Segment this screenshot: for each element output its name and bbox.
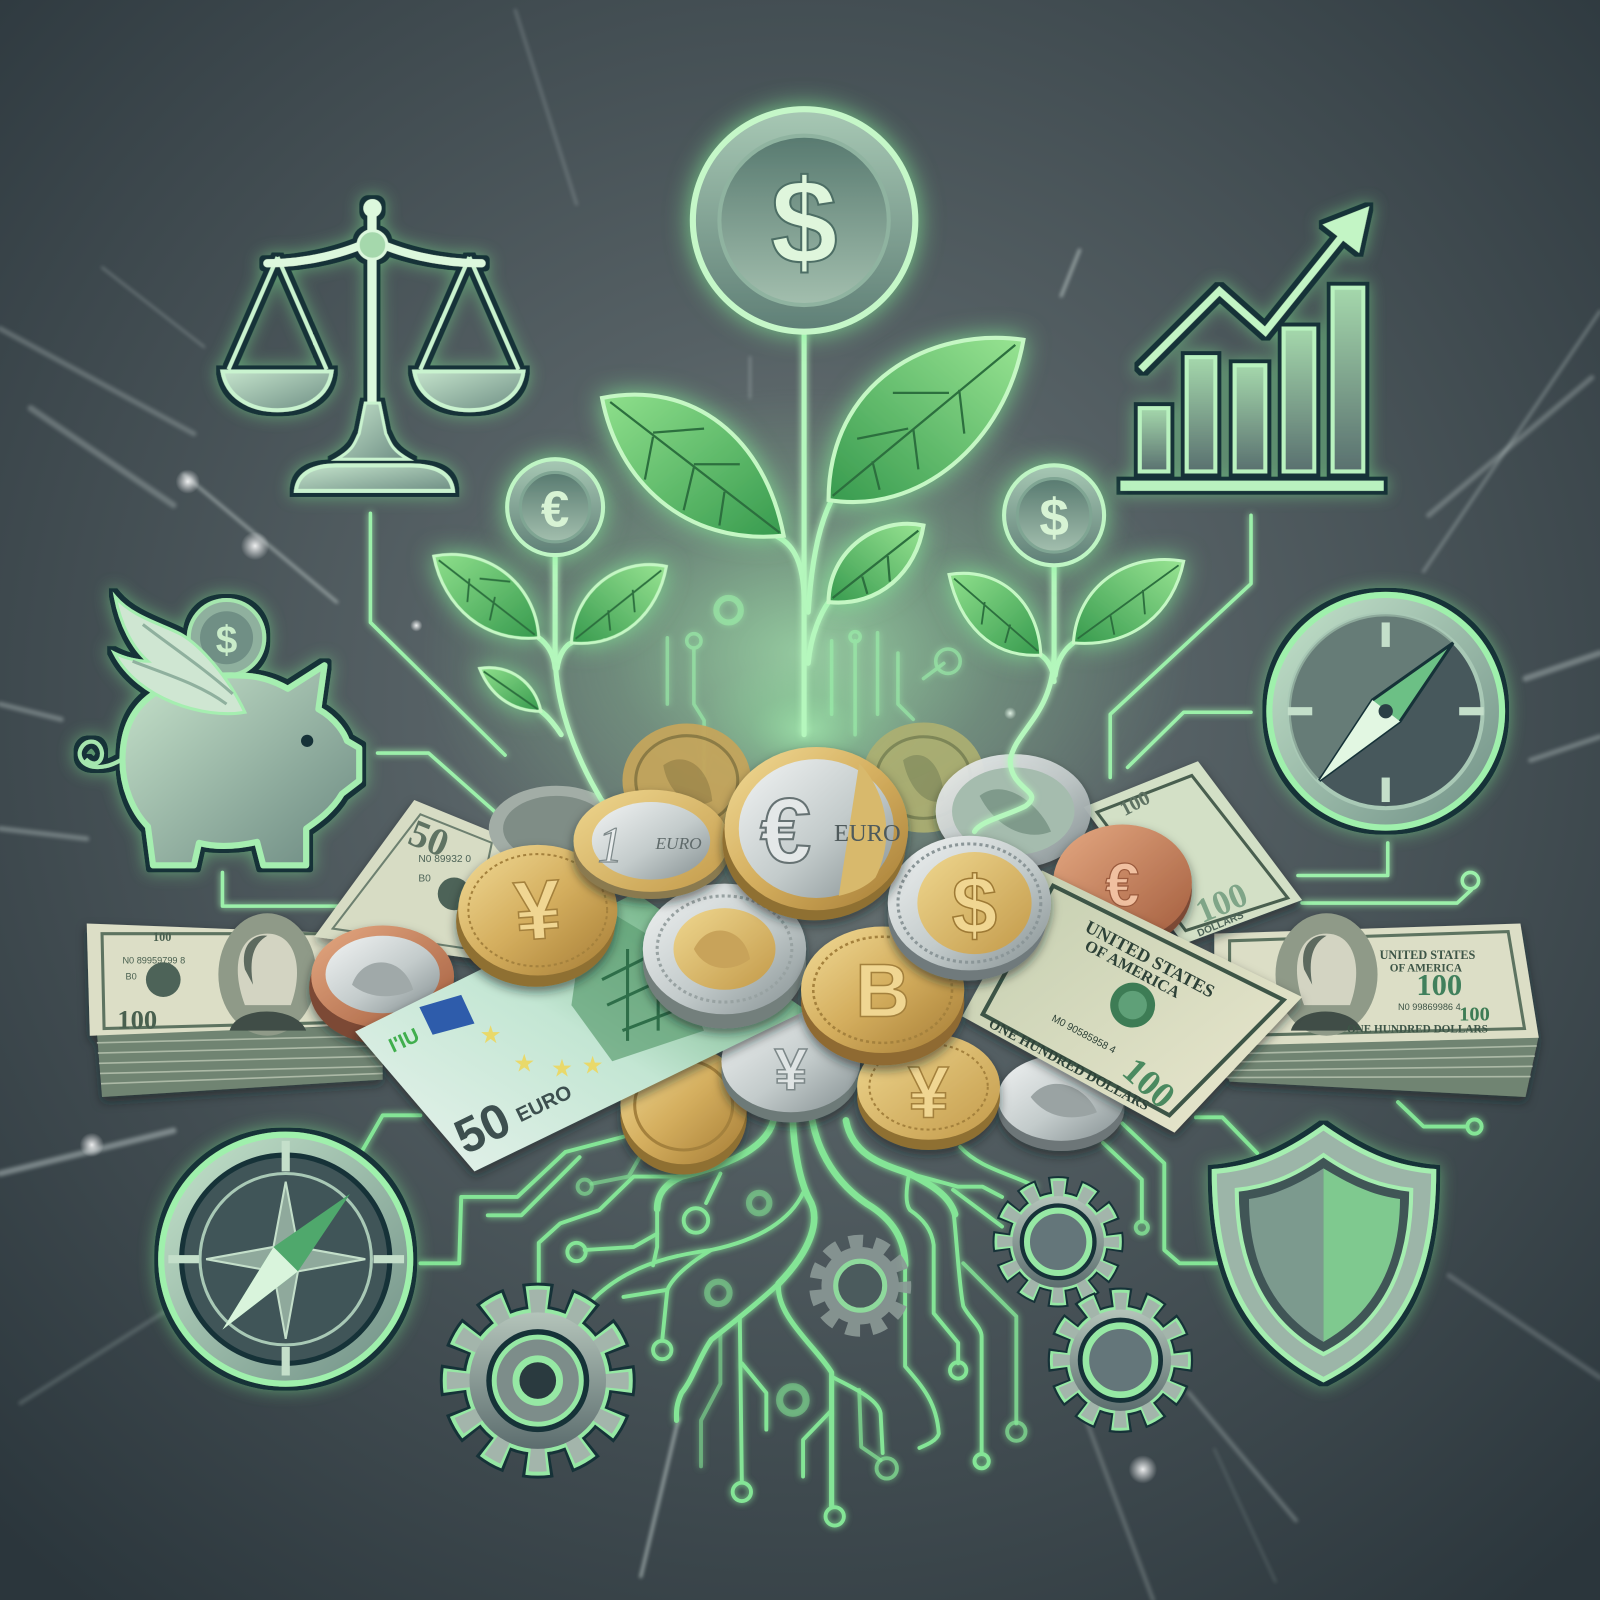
bottom coin gold yen: ¥ [908, 1050, 949, 1133]
back silver coin left [489, 786, 623, 871]
euro banknote: ★ [513, 1050, 535, 1077]
euro banknote: I'IU [386, 1025, 423, 1058]
euro banknote: ★ [582, 1052, 604, 1079]
icon: growth bar chart with arrow [1120, 206, 1384, 491]
small plant right [949, 465, 1184, 655]
dollar banknote: M0 90585958 4 [1050, 1013, 1118, 1056]
euro note value: 50 [446, 1093, 519, 1165]
right banknote stack: N0 99869986 4 [1398, 1002, 1461, 1012]
icon: dim central gear [821, 1247, 899, 1324]
icon: balance scales [222, 199, 523, 491]
euro banknote [355, 893, 806, 1171]
back left banknote [314, 800, 504, 960]
bottom coin silver yen [721, 1010, 860, 1122]
dollar banknote: UNITED STATES [1082, 916, 1218, 1002]
coin: bitcoin: B [855, 949, 910, 1033]
root trunks [657, 1120, 955, 1284]
leaves [434, 554, 666, 711]
right banknote stack: OF AMERICA [1390, 962, 1463, 974]
euro banknote: ★ [551, 1056, 573, 1083]
piggy coin [189, 600, 264, 676]
back gold coin right [862, 722, 985, 833]
dollar banknote [962, 870, 1302, 1133]
icon: gear right lower [1062, 1302, 1179, 1419]
dollar banknote: OF AMERICA [1082, 936, 1184, 1002]
back right banknote: DOLLARS [1196, 910, 1246, 939]
icon: shield [1214, 1128, 1434, 1380]
coin: copper euro [1053, 824, 1192, 949]
central green glow [418, 388, 1194, 918]
euro banknote: ★ [480, 1022, 502, 1049]
back right banknote: 100 [1190, 875, 1253, 931]
euro coin sprout: € [541, 481, 569, 538]
back silver coin right [936, 754, 1091, 868]
coin: copper left [309, 926, 454, 1044]
euro coin sprout [507, 459, 603, 555]
coin: yen gold [456, 845, 617, 987]
left banknote stack: B0 [126, 972, 137, 982]
dollar coin sprout: $ [1039, 489, 1069, 548]
leaves [949, 559, 1184, 655]
right banknote stack [1214, 913, 1539, 1097]
left banknote stack: N0 89959799 8 [122, 955, 185, 965]
dollar banknote: 100 [1115, 1049, 1183, 1116]
large plant [602, 109, 1023, 603]
sparkles [80, 469, 1157, 1484]
euro banknote: EURO [513, 1081, 576, 1127]
coin: big euro [722, 747, 908, 920]
small plant left [434, 459, 666, 711]
icon: compass lower left [161, 1135, 410, 1384]
icon: gear right upper [1005, 1189, 1111, 1295]
back right banknote: 100 [1117, 787, 1154, 821]
coin: dollar [888, 836, 1051, 981]
large leaves [602, 338, 1023, 603]
bottom coin gold [620, 1046, 747, 1174]
icon: compass upper right [1269, 595, 1502, 828]
right banknote stack: ONE HUNDRED DOLLARS [1347, 1024, 1488, 1036]
dollar coin sprout [1004, 465, 1104, 565]
coin: dollar: $ [952, 861, 997, 952]
right banknote stack: UNITED STATES [1380, 948, 1476, 962]
large dollar coin: $ [771, 154, 838, 289]
bottom coin gold yen [857, 1034, 1000, 1150]
left banknote stack: 100 [117, 1005, 157, 1035]
bottom coin silver right [998, 1055, 1124, 1151]
back left banknote: N0 89932 0 [418, 854, 471, 865]
right banknote stack: 100 [1459, 1003, 1490, 1025]
left banknote stack: 100 [153, 930, 171, 944]
dollar banknote: ONE HUNDRED DOLLARS [986, 1016, 1152, 1114]
coin: yen gold: ¥ [511, 861, 565, 958]
right banknote stack: 100 [1416, 968, 1462, 1002]
coin: one euro [573, 790, 729, 899]
back right banknote [1084, 761, 1302, 944]
back left banknote: B0 [418, 874, 431, 885]
money pile [87, 335, 1539, 1174]
large dollar coin [693, 109, 915, 332]
coin: big euro: € [760, 780, 811, 882]
coin: one euro: EURO [654, 834, 702, 853]
roots and circuit traces [352, 1102, 1482, 1526]
coin: one euro: 1 [597, 818, 623, 874]
coin: bitcoin [801, 927, 964, 1065]
coin: big euro: EURO [834, 820, 901, 847]
back left banknote: 50 [403, 811, 455, 866]
piggy coin: $ [216, 619, 238, 662]
bottom coin silver yen: ¥ [774, 1036, 807, 1103]
plant stems over back coins [539, 335, 1073, 832]
back gold coin left [622, 723, 751, 838]
left banknote stack [87, 913, 383, 1097]
coin: silver gold centre [643, 884, 806, 1029]
icon: flying piggy bank [80, 597, 359, 865]
upper circuit lines [222, 513, 1479, 906]
coin: copper euro: € [1105, 851, 1139, 919]
icon: large gear [459, 1302, 616, 1459]
